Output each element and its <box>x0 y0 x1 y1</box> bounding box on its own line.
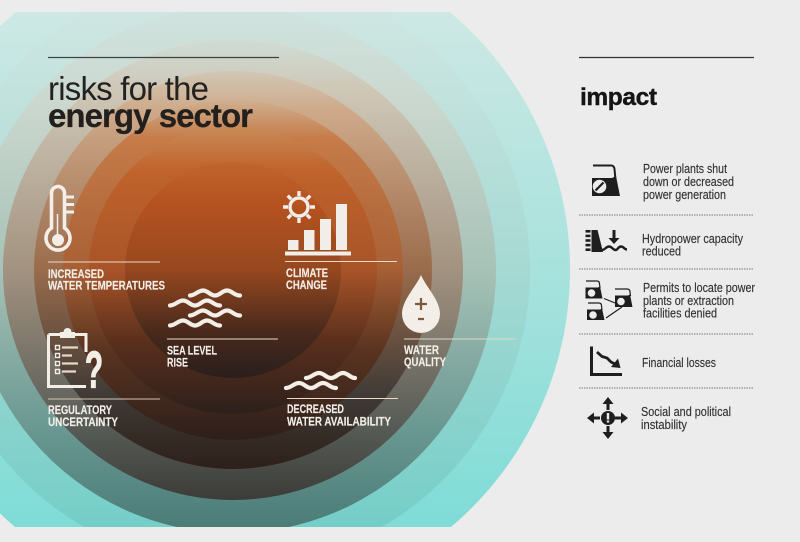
risk: sea level rise: RISE <box>167 356 188 370</box>
risk: regulatory uncertainty <box>48 328 160 429</box>
impact: power plants <box>592 162 734 202</box>
impact: financial losses: Financial losses <box>642 356 716 370</box>
risk: decreased water availability: WATER AVAILABILITY <box>287 414 391 428</box>
risk: climate change: CHANGE <box>286 278 327 292</box>
risk: decreased water availability: DECREASED <box>287 402 344 416</box>
risk: sea level rise <box>167 290 278 370</box>
risk: climate change <box>283 191 397 292</box>
icon: dam and falling water <box>586 230 627 252</box>
title: energy sector <box>48 97 253 134</box>
risk: water quality: WATER <box>404 343 439 357</box>
risk: water quality: QUALITY <box>404 355 446 369</box>
impact heading: impact <box>580 84 657 111</box>
impact: social and political instability: Social and political <box>641 405 731 419</box>
risk: sea level rise: SEA LEVEL <box>167 344 217 358</box>
impact: permits denied: facilities denied <box>643 306 717 320</box>
icon: falling chart <box>592 346 622 374</box>
icon: water drop <box>402 275 440 333</box>
impact: permits denied: Permits to locate power <box>643 281 755 295</box>
impact: power plants: Power plants shut <box>643 162 727 176</box>
impact: financial losses <box>592 346 716 374</box>
icon: exclamation with four arrows <box>587 397 628 439</box>
impact: power plants: down or decreased <box>643 175 734 189</box>
risk: regulatory uncertainty: UNCERTAINTY <box>48 415 118 429</box>
icon: thermometer <box>46 186 74 250</box>
title <box>48 70 253 134</box>
risk: increased water temperatures: INCREASED <box>48 267 104 281</box>
impact: hydropower <box>586 230 744 258</box>
impact: social and political instability: instability <box>641 418 688 432</box>
risk: increased water temperatures: WATER TEMPERATURES <box>48 278 165 292</box>
risk: regulatory uncertainty: REGULATORY <box>48 403 112 417</box>
impact: power plants: power generation <box>643 188 726 202</box>
icon: linked power plants <box>586 281 632 320</box>
icon: clipboard with question mark: ? <box>85 342 103 400</box>
title: risks for the <box>48 70 209 107</box>
icon: sun and bar chart <box>283 191 351 256</box>
icon: two waves <box>286 373 355 388</box>
impact: permits denied: plants or extraction <box>643 294 734 308</box>
impact: permits denied <box>586 281 755 320</box>
risk: decreased water availability <box>286 373 398 428</box>
impact: hydropower: Hydropower capacity <box>642 232 744 246</box>
risk: water quality <box>402 275 516 369</box>
risk: increased water temperatures <box>46 186 165 292</box>
impact: hydropower: reduced <box>642 244 681 258</box>
impact: social and political instability <box>587 397 731 439</box>
risk: climate change: CLIMATE <box>286 266 328 280</box>
concentric risk circles <box>0 12 570 527</box>
icon: four waves <box>170 290 240 326</box>
icon: power plant <box>592 166 620 196</box>
